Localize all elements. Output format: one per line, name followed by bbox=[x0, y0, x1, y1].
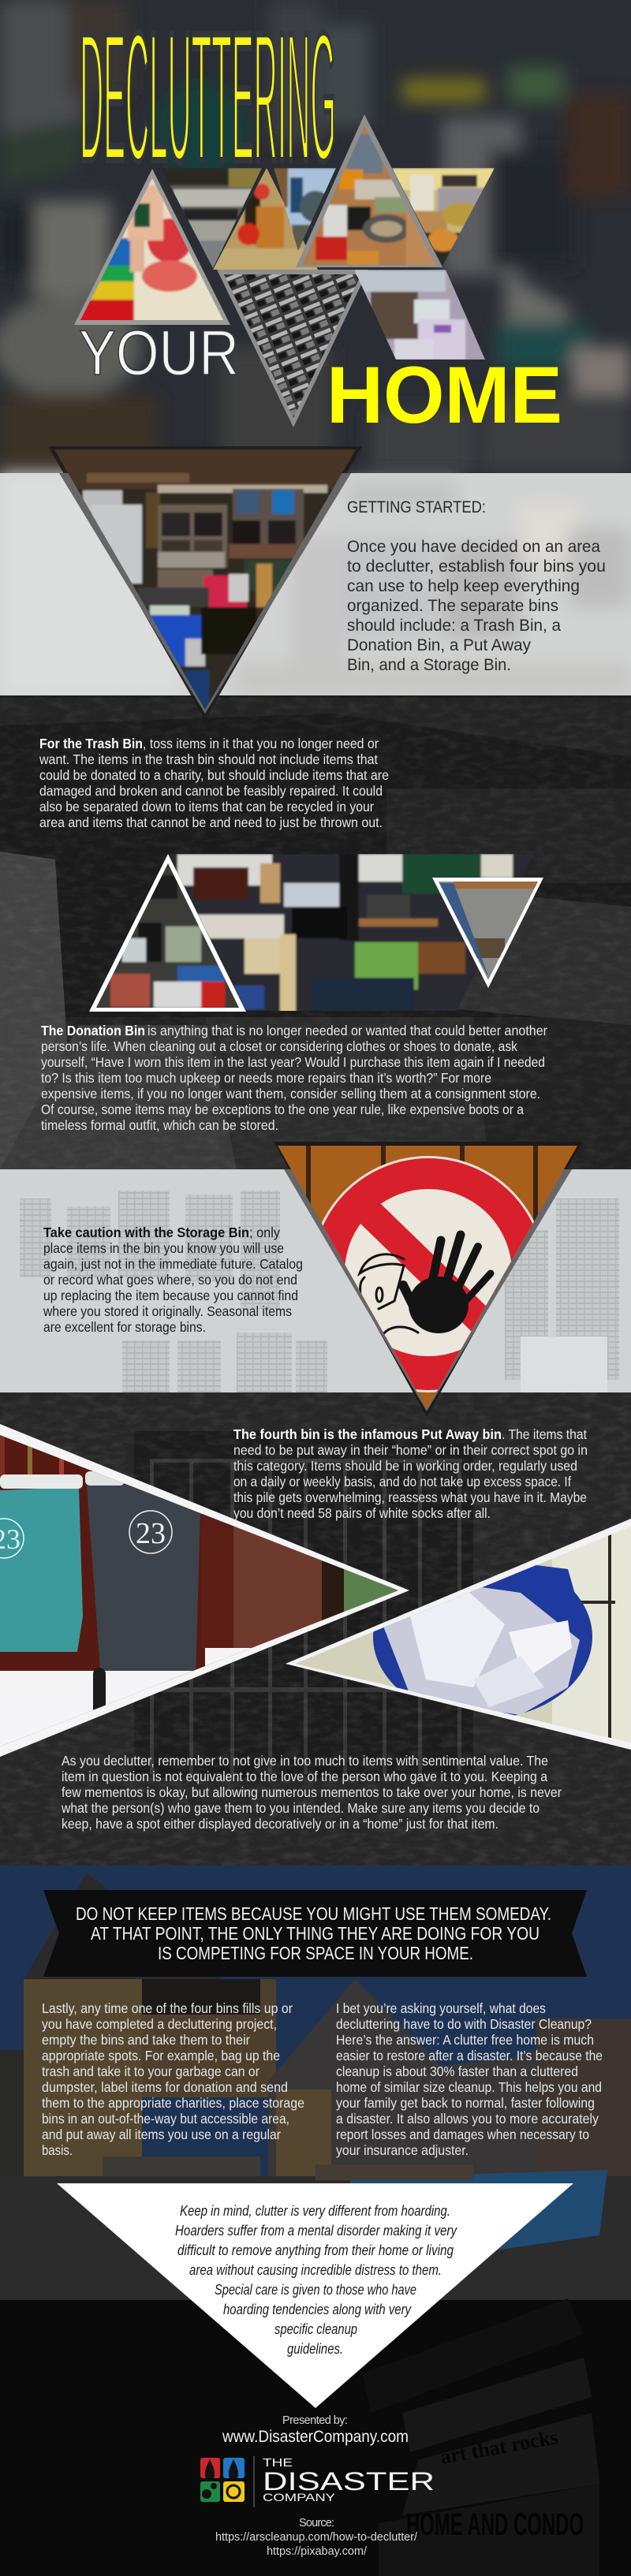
text: trash bin: want. The items in the trash bin should not include items that bbox=[39, 751, 378, 767]
text: getting started body: Once you have decided on an area bbox=[347, 538, 600, 556]
text: sources: https://arscleanup.com/how-to-declutter/ bbox=[215, 2531, 418, 2544]
text: left column: empty the bins and take them to their bbox=[42, 2032, 250, 2048]
banner bbox=[43, 1890, 587, 1977]
photo group: cluttered office bbox=[89, 854, 543, 1013]
text: website: www.DisasterCompany.com bbox=[222, 2428, 409, 2446]
text: left column: you have completed a decluttering project, bbox=[42, 2016, 277, 2032]
text: getting started body: Donation Bin, a Put Away bbox=[347, 636, 531, 654]
text: left column: bins in an out-of-the-way but accessible area, bbox=[42, 2111, 289, 2127]
text: storage bin: Take caution with the Storage Bin bbox=[43, 1225, 249, 1240]
text: right column: cleanup is about 30% faster than a cluttered bbox=[336, 2063, 578, 2079]
text: trash bin: For the Trash Bin bbox=[39, 736, 143, 751]
heading: home: HOME bbox=[327, 350, 562, 440]
callout: hoarding triangle bbox=[57, 2183, 573, 2408]
text: donation bin bbox=[41, 1023, 547, 1133]
text: presented by: Presented by: bbox=[282, 2414, 348, 2427]
text: put away bin: this pile gets overwhelming, reassess what you have in it. Maybe bbox=[233, 1489, 587, 1505]
triangle: bags on floor bbox=[89, 854, 248, 1013]
callout: hoarding triangle: Hoarders suffer from a mental disorder making it very bbox=[175, 2223, 457, 2239]
text: trash bin: damaged and broken and cannot be feasibly repaired. It could bbox=[39, 783, 383, 799]
text: right column: your insurance adjuster. bbox=[336, 2142, 469, 2158]
text: getting started body: Bin, and a Storage Bin. bbox=[347, 656, 511, 674]
callout: hoarding triangle: Special care is given to those who have bbox=[215, 2282, 416, 2298]
photo: yellow desk bbox=[392, 168, 495, 268]
text: getting started heading: GETTING STARTED: bbox=[347, 498, 486, 516]
text: storage bin bbox=[43, 1225, 303, 1335]
text: right column bbox=[336, 2000, 603, 2158]
photo: desk with markers bbox=[161, 168, 263, 270]
heading: your: YOUR bbox=[79, 318, 239, 389]
section background: trash bin bbox=[0, 695, 631, 1169]
text: storage bin: or record what goes where, so you do not end bbox=[43, 1272, 297, 1288]
text: put away bin: you don’t need 58 pairs of white socks after all. bbox=[233, 1505, 491, 1521]
text: getting started body: organized. The separate bins bbox=[347, 597, 558, 615]
text: sources bbox=[215, 2517, 418, 2558]
text: storage bin: again, just not in the immediate future. Catalog bbox=[43, 1256, 303, 1272]
callout: hoarding triangle: guidelines. bbox=[287, 2341, 343, 2357]
triangle: garage shelves photo bbox=[47, 446, 363, 720]
icon: stop hand bbox=[359, 1235, 491, 1335]
text: right column: home of similar size cleanup. This helps you and bbox=[336, 2079, 602, 2095]
text: donation bin: person’s life. When cleaning out a closet or considering clothes or shoes to donate, ask bbox=[41, 1038, 517, 1054]
text: sentimental value: keep, have a spot either displayed decoratively or in a “home” just for that item. bbox=[62, 1816, 498, 1832]
text: right column: decluttering have to do with Disaster Cleanup? bbox=[336, 2016, 592, 2032]
text: put away bin: . The items that bbox=[502, 1426, 587, 1442]
text: getting started body: to declutter, establish four bins you bbox=[347, 557, 606, 576]
text: donation bin: timeless formal outfit, which can be stored. bbox=[41, 1117, 278, 1133]
section background: houses bbox=[0, 1866, 631, 2300]
text: donation bin: yourself, “Have I worn this item in the last year? Would I purchase this item again if I needed bbox=[41, 1054, 545, 1070]
text: trash bin: area and items that cannot be and need to just be thrown out. bbox=[39, 815, 383, 830]
text: left column: appropriate spots. For example, bag up the bbox=[42, 2048, 280, 2063]
icon: biohazard square bbox=[223, 2481, 245, 2502]
hero background photo bbox=[0, 0, 631, 473]
text: right column: easier to restore after a disaster. It’s because the bbox=[336, 2048, 603, 2063]
text: left column: Lastly, any time one of the four bins fills up or bbox=[42, 2000, 293, 2016]
title: decluttering: DECLUTTERING bbox=[80, 0, 336, 199]
text: sentimental value bbox=[61, 1753, 562, 1832]
triangle: black and white crates bbox=[217, 270, 368, 427]
triangle: wheelie bins photo bbox=[0, 1424, 410, 1758]
label: bin number: 23 bbox=[136, 1517, 166, 1550]
text: right column: I bet you’re asking yourself, what does bbox=[336, 2000, 546, 2016]
text: storage bin: where you stored it originally. Seasonal items bbox=[43, 1303, 292, 1319]
text: right column: Here’s the answer: A clutter free home is much bbox=[336, 2032, 594, 2048]
background sign text: art that rocks bbox=[439, 2425, 560, 2469]
text: put away bin bbox=[233, 1426, 588, 1521]
triangle: paper bin photo bbox=[286, 1519, 631, 1750]
text: trash bin: also be separated down to items that can be recycled in your bbox=[39, 799, 374, 815]
callout: hoarding triangle: Keep in mind, clutter is very different from hoarding. bbox=[180, 2203, 450, 2219]
text: sentimental value: As you declutter, remember to not give in too much to items with sentimental value. The bbox=[62, 1753, 548, 1769]
icon: water square bbox=[223, 2458, 245, 2478]
callout: hoarding triangle: hoarding tendencies along with very bbox=[223, 2302, 412, 2317]
text: storage bin: ; only bbox=[249, 1225, 280, 1240]
section background: put away bbox=[0, 1392, 631, 1866]
text: storage bin: up replacing the item because you cannot find bbox=[43, 1288, 298, 1303]
logo: the disaster company: THE bbox=[263, 2456, 293, 2470]
panel: getting started bbox=[0, 473, 631, 695]
triangle: kitchen wall bbox=[432, 878, 543, 988]
text: storage bin: place items in the bin you know you will use bbox=[43, 1240, 284, 1256]
text: donation bin: is anything that is no longer needed or wanted that could better another bbox=[147, 1023, 547, 1038]
text: getting started body: can use to help keep everything bbox=[347, 577, 580, 595]
text: donation bin: The Donation Bin bbox=[41, 1023, 145, 1038]
triangle: messy table bbox=[296, 114, 442, 268]
text: sentimental value: few mementos is okay, but allowing numerous mementos to take over your home, is never bbox=[62, 1784, 562, 1800]
text: left column: dumpster, label items for donation and send bbox=[42, 2079, 288, 2095]
text: put away bin: on a daily or weekly basis, and do not take up excess space. If bbox=[233, 1474, 571, 1489]
logo: the disaster company bbox=[200, 2456, 435, 2507]
logo: the disaster company: DISASTER bbox=[263, 2467, 435, 2496]
text: right column: report losses and damages when necessary to bbox=[336, 2127, 589, 2142]
callout: hoarding triangle: specific cleanup bbox=[274, 2321, 357, 2337]
text: left column: and put away all items you use on a regular bbox=[42, 2127, 281, 2142]
text: sources: Source: bbox=[299, 2517, 334, 2529]
text: donation bin: expensive items, if you no longer want them, consider selling them at a consignment store. bbox=[41, 1086, 540, 1102]
text: sentimental value: item in question is not equivalent to the love of the person who gave it to you. Keeping a bbox=[62, 1769, 547, 1784]
text: donation bin: Of course, some items may be exceptions to the one year rule, like expensive boots or a bbox=[41, 1102, 524, 1117]
text: put away bin: The fourth bin is the infamous Put Away bin bbox=[233, 1426, 502, 1442]
text: left column: trash and take it to your garbage can or bbox=[42, 2063, 259, 2079]
banner: AT THAT POINT, THE ONLY THING THEY ARE DOING FOR YOU bbox=[91, 1923, 540, 1944]
logo: the disaster company: COMPANY bbox=[263, 2491, 336, 2503]
callout: hoarding triangle: difficult to remove anything from their home or living bbox=[177, 2242, 454, 2258]
text: trash bin: , toss items in it that you no longer need or bbox=[143, 736, 379, 751]
hero photo triangles bbox=[74, 114, 495, 427]
photo: tan megaphones bbox=[213, 168, 319, 272]
text: right column: your family get back to normal, faster following bbox=[336, 2095, 595, 2111]
text: storage bin: are excellent for storage bins. bbox=[43, 1319, 206, 1335]
icon: fire square bbox=[200, 2458, 220, 2478]
callout: hoarding triangle: area without causing incredible distress to them. bbox=[189, 2262, 442, 2278]
text: getting started body bbox=[347, 538, 606, 674]
section background: footer sign photo bbox=[0, 2298, 631, 2576]
text: left column bbox=[42, 2000, 304, 2158]
photo: papers bbox=[354, 270, 488, 360]
text: right column: a disaster. It also allows you to more accurately bbox=[336, 2111, 599, 2127]
panel: storage bin bbox=[0, 1169, 631, 1392]
text: put away bin: this category. Items should be in working order, regularly used bbox=[233, 1458, 577, 1474]
triangle: stop sign photo bbox=[272, 1142, 584, 1417]
photo: blue street scene bbox=[274, 168, 337, 255]
text: put away bin: need to be put away in their “home” or in their correct spot go in bbox=[233, 1442, 588, 1458]
text: sentimental value: what the person(s) who gave them to you intended. Make sure any items you decide to bbox=[61, 1800, 540, 1816]
text: left column: basis. bbox=[42, 2142, 73, 2158]
text: trash bin: could be donated to a charity, but should include items that are bbox=[39, 767, 389, 783]
triangle: coloured blocks bbox=[74, 169, 233, 325]
banner: IS COMPETING FOR SPACE IN YOUR HOME. bbox=[158, 1943, 473, 1963]
text: trash bin bbox=[39, 736, 389, 830]
text: left column: them to the appropriate charities, place storage bbox=[42, 2095, 304, 2111]
text: sources: https://pixabay.com/ bbox=[267, 2545, 368, 2558]
text: donation bin: to? Is this item too much upkeep or needs more repairs than it’s worth?” For more bbox=[41, 1070, 491, 1086]
text: getting started body: should include: a Trash Bin, a bbox=[347, 617, 561, 635]
icon: mold square bbox=[200, 2481, 220, 2502]
